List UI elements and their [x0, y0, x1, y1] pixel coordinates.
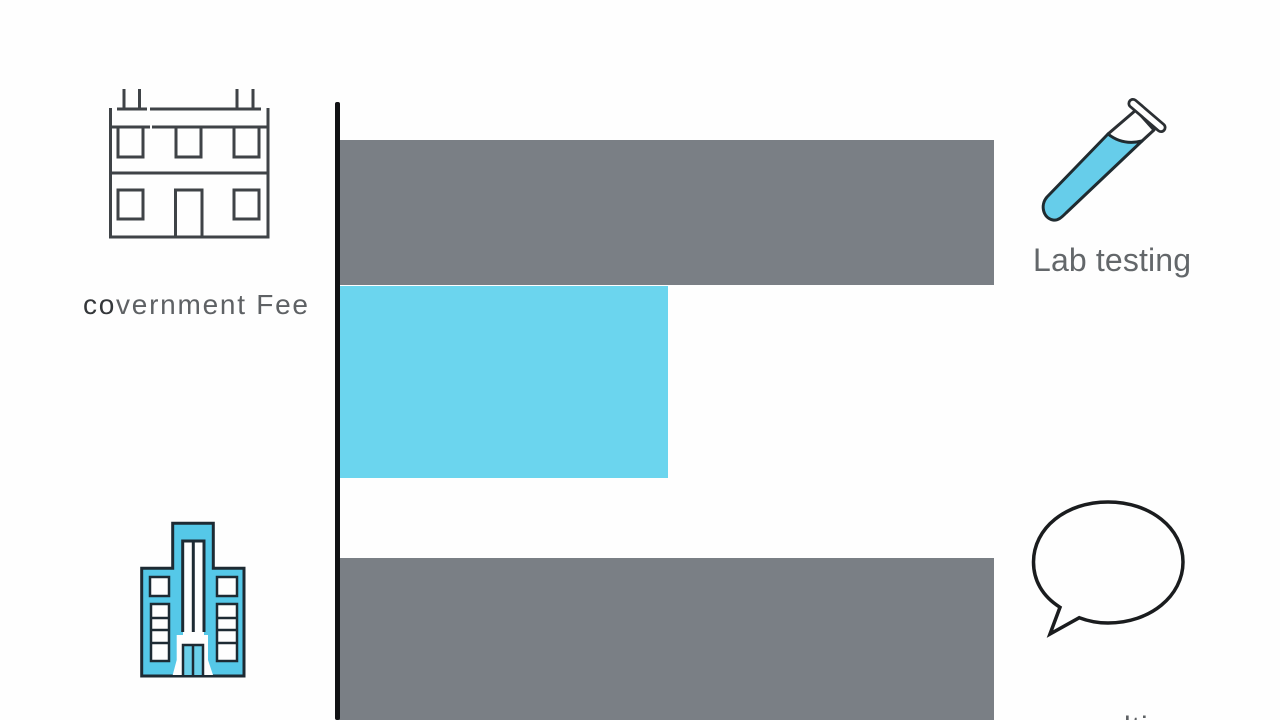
left windows — [150, 577, 169, 661]
icon: office tower — [142, 523, 244, 676]
tower body — [142, 523, 244, 676]
right windows — [217, 577, 237, 661]
tube neck — [1108, 110, 1154, 141]
vertical axis — [335, 102, 340, 720]
tube liquid — [1043, 134, 1142, 220]
entrance highlight — [173, 635, 213, 675]
icon: government building — [110, 89, 268, 237]
label: lab testing: Lab testing — [1033, 242, 1191, 278]
tube cap — [1133, 104, 1161, 128]
entrance door — [183, 645, 203, 675]
bar chart — [335, 102, 994, 720]
central columns — [183, 541, 204, 635]
icon: test tube — [1043, 104, 1161, 220]
bar: lab testing — [339, 140, 994, 285]
bar: government fee — [339, 286, 668, 478]
bar: consulting — [339, 558, 994, 720]
label: government fee: covernment Fee — [83, 289, 308, 320]
icon: speech bubble — [1034, 502, 1183, 634]
